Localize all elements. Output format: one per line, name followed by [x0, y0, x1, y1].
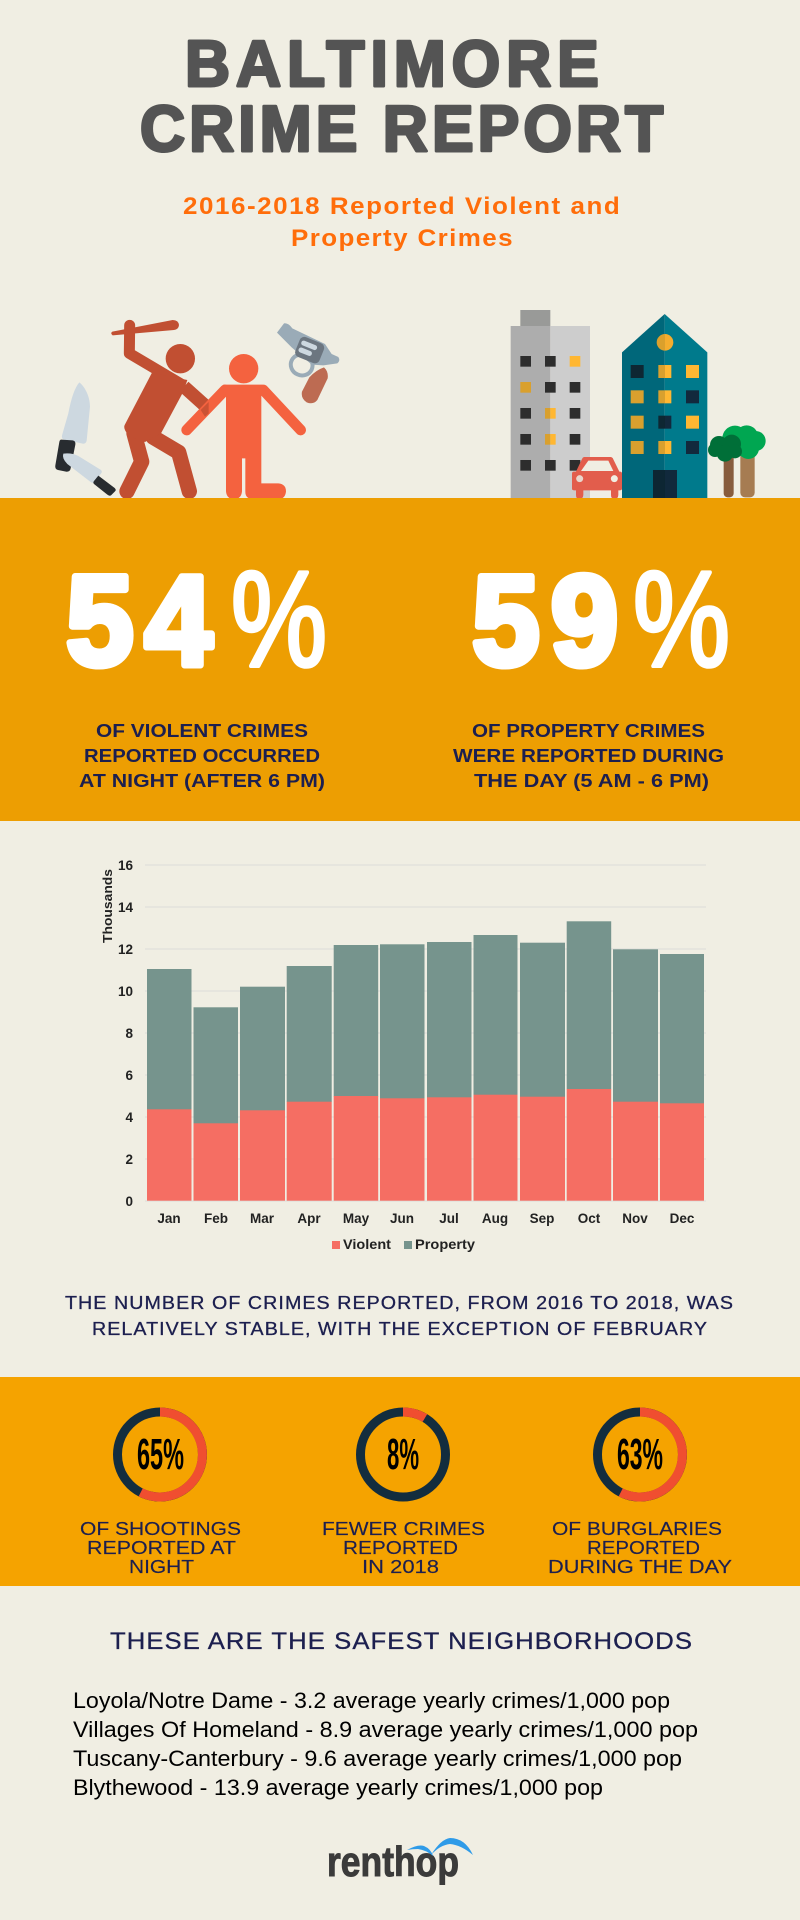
- text: neighborhoods list: Loyola/Notre Dame - 3.2 average yearly crimes/1,000 pop: [73, 1688, 670, 1713]
- stat: 59 percent: %: [633, 543, 730, 695]
- text: violent crimes caption: [79, 721, 325, 791]
- x axis labels: Dec: [670, 1211, 695, 1226]
- y axis labels: 16: [118, 858, 133, 873]
- icon: victim figure: [187, 354, 301, 499]
- legend: Violent: [343, 1236, 391, 1252]
- title: CRIME REPORT: [140, 92, 663, 165]
- title: BALTIMORE: [185, 27, 599, 100]
- stat: 59 percent: [472, 543, 730, 695]
- text: shootings caption: REPORTED AT: [87, 1538, 236, 1558]
- title: [140, 27, 663, 165]
- subtitle: [183, 193, 620, 252]
- icon: attacker with baton: [111, 320, 204, 491]
- text: shootings caption: OF SHOOTINGS: [80, 1519, 241, 1539]
- x axis labels: Jan: [157, 1211, 181, 1226]
- stat: 54 percent: 54: [66, 550, 212, 693]
- text: chart takeaway: [65, 1292, 734, 1339]
- icon: revolver: [277, 323, 339, 403]
- donut: 8 percent fewer crimes: [360, 1412, 446, 1497]
- text: violent crimes caption: REPORTED OCCURRED: [84, 746, 320, 766]
- y axis labels: 8: [125, 1026, 133, 1041]
- text: property crimes caption: OF PROPERTY CRIMES: [472, 721, 705, 741]
- x axis labels: Nov: [622, 1211, 648, 1226]
- text: chart takeaway: RELATIVELY STABLE, WITH THE EXCEPTION OF FEBRUARY: [92, 1318, 708, 1339]
- stat: 54 percent: %: [231, 543, 327, 695]
- text: property crimes caption: THE DAY (5 AM - 6 PM): [474, 771, 709, 791]
- logo: renthop: renthop: [327, 1838, 459, 1885]
- y axis labels: 0: [125, 1194, 133, 1209]
- y axis labels: 14: [118, 900, 133, 915]
- text: neighborhoods list: Blythewood - 13.9 average yearly crimes/1,000 pop: [73, 1775, 603, 1800]
- text: violent crimes caption: OF VIOLENT CRIMES: [96, 721, 308, 741]
- x axis labels: Aug: [482, 1211, 508, 1226]
- y axis labels: [118, 858, 133, 1209]
- text: violent crimes caption: AT NIGHT (AFTER 6 PM): [79, 771, 325, 791]
- subtitle: 2016-2018 Reported Violent and: [183, 193, 620, 220]
- donut: 8 percent fewer crimes: 8%: [387, 1430, 419, 1479]
- x axis labels: May: [343, 1211, 370, 1226]
- text: fewer crimes caption: IN 2018: [362, 1557, 439, 1577]
- text: chart takeaway: THE NUMBER OF CRIMES REPORTED, FROM 2016 TO 2018, WAS: [65, 1292, 734, 1313]
- x axis labels: Sep: [530, 1211, 554, 1226]
- text: burglaries caption: OF BURGLARIES: [552, 1519, 722, 1539]
- y axis labels: 2: [125, 1152, 133, 1167]
- x axis labels: Oct: [578, 1211, 601, 1226]
- x axis labels: Jun: [390, 1211, 414, 1226]
- y axis labels: 12: [118, 942, 133, 957]
- text: fewer crimes caption: FEWER CRIMES: [322, 1519, 485, 1539]
- bars: property: [147, 921, 704, 1124]
- text: burglaries caption: REPORTED: [587, 1538, 700, 1558]
- text: property crimes caption: WERE REPORTED DURING: [453, 746, 724, 766]
- x axis labels: [157, 1211, 695, 1226]
- text: neighborhoods list: [73, 1688, 698, 1800]
- bars: violent: [147, 1089, 704, 1201]
- legend: [332, 1236, 475, 1252]
- icon: red car: [572, 457, 622, 499]
- x axis labels: Feb: [204, 1211, 228, 1226]
- text: property crimes caption: [453, 721, 724, 791]
- x axis labels: Mar: [250, 1211, 275, 1226]
- y axis labels: 10: [118, 984, 133, 999]
- illustration: city buildings: [511, 310, 766, 499]
- text: neighborhoods list: Villages Of Homeland - 8.9 average yearly crimes/1,000 pop: [73, 1717, 698, 1742]
- legend: Property: [415, 1236, 475, 1252]
- x axis labels: Jul: [439, 1211, 459, 1226]
- donut: 65 percent shootings: 65%: [137, 1430, 184, 1479]
- y axis labels: 6: [125, 1068, 133, 1083]
- icon: knives: [55, 382, 116, 496]
- y axis title: Thousands: [101, 869, 115, 943]
- text: shootings caption: [80, 1519, 241, 1577]
- text: burglaries caption: [548, 1519, 732, 1577]
- text: shootings caption: NIGHT: [129, 1557, 194, 1577]
- icon: grey tower: [511, 310, 590, 499]
- heading: safest neighborhoods: THESE ARE THE SAFEST NEIGHBORHOODS: [110, 1628, 693, 1655]
- panel: headline stats band: [0, 498, 800, 821]
- text: burglaries caption: DURING THE DAY: [548, 1557, 732, 1577]
- stat: 54 percent: [66, 543, 327, 695]
- x axis labels: Apr: [297, 1211, 321, 1226]
- donut: 65 percent shootings: [118, 1412, 202, 1497]
- y axis labels: 4: [125, 1110, 133, 1125]
- icon: trees: [708, 425, 766, 497]
- donut: 63 percent burglaries: [598, 1412, 682, 1497]
- text: fewer crimes caption: REPORTED: [343, 1538, 458, 1558]
- stat: 59 percent: 59: [472, 550, 618, 693]
- subtitle: Property Crimes: [291, 225, 513, 252]
- illustration: violent crime figures and weapons: [55, 320, 339, 499]
- text: fewer crimes caption: [322, 1519, 485, 1577]
- text: neighborhoods list: Tuscany-Canterbury - 9.6 average yearly crimes/1,000 pop: [73, 1746, 682, 1771]
- chart: crimes by month stacked bars: [101, 858, 706, 1252]
- donut: 63 percent burglaries: 63%: [617, 1430, 663, 1479]
- icon: teal building: [622, 314, 707, 499]
- panel: donut stats band: [0, 1377, 800, 1586]
